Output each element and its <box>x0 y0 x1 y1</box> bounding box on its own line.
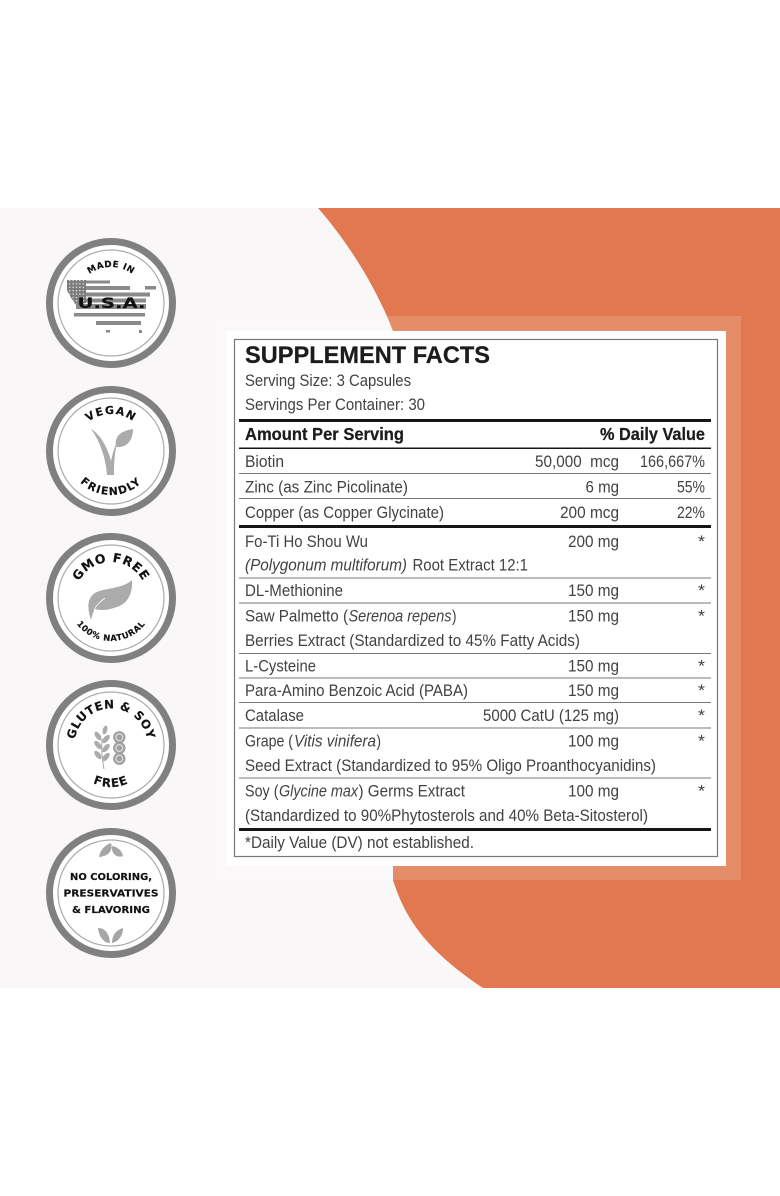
row: soy: (Standardized to 90%Phytosterols and 40% Beta-Sitosterol) <box>245 806 648 825</box>
row: catalase <box>245 706 705 725</box>
row: l-cysteine: L-Cysteine <box>245 656 316 676</box>
row: l-cysteine: * <box>698 656 705 676</box>
row: paba: Para-Amino Benzoic Acid (PABA) <box>245 681 468 700</box>
label: gmo free: GMO FREE <box>73 552 150 580</box>
row: catalase: 5000 CatU (125 mg) <box>483 706 619 725</box>
table column headers: % Daily Value <box>600 424 705 444</box>
icon: bottom leaves <box>98 928 123 943</box>
row: saw palmetto: Saw Palmetto ( <box>245 606 348 626</box>
row: biotin: 166,667% <box>640 452 705 471</box>
row: grape: 100 mg <box>568 732 619 750</box>
icon: flag map of usa <box>67 280 156 333</box>
row: soy: Glycine max <box>279 782 358 800</box>
label: no coloring text: NO COLORING, <box>70 872 152 883</box>
icon: top leaves <box>99 843 123 857</box>
label: no coloring text: & FLAVORING <box>72 905 150 916</box>
row: grape: Vitis vinifera <box>294 732 376 750</box>
row: grape: ) <box>376 732 381 750</box>
background band <box>0 208 780 988</box>
row: dl-methionine: * <box>698 581 705 600</box>
icon: leaf <box>88 580 132 620</box>
row: saw palmetto: Berries Extract (Standardized to 45% Fatty Acids) <box>245 631 580 650</box>
row: fo-ti <box>245 532 705 574</box>
label: no coloring text <box>64 872 159 916</box>
label: no coloring text: PRESERVATIVES <box>64 888 159 900</box>
label: usa: U.S.A. <box>78 296 146 312</box>
row: saw palmetto <box>245 606 705 650</box>
row: soy: * <box>698 782 705 800</box>
row: soy: ) Germs Extract <box>358 782 465 800</box>
label: made in: MADE IN <box>86 260 135 274</box>
row: biotin <box>245 452 705 471</box>
row: l-cysteine <box>245 656 705 676</box>
row: dl-methionine <box>245 581 705 600</box>
translucent panel frame <box>212 316 741 880</box>
label: gluten and soy: GLUTEN & SOY <box>67 700 156 738</box>
row: biotin: 50,000 mcg <box>535 452 619 471</box>
row: fo-ti: * <box>698 532 705 551</box>
table column headers: Amount Per Serving <box>245 424 404 444</box>
label: 100% natural: 100% NATURAL <box>77 620 145 642</box>
row: biotin: Biotin <box>245 452 284 471</box>
row: soy <box>245 782 705 825</box>
row: catalase: Catalase <box>245 706 304 725</box>
row: zinc: Zinc (as Zinc Picolinate) <box>245 478 408 496</box>
serving information: Servings Per Container: 30 <box>245 395 425 414</box>
row: copper <box>245 503 705 522</box>
row: fo-ti: Root Extract 12:1 <box>412 556 528 574</box>
row: l-cysteine: 150 mg <box>568 656 619 676</box>
row: zinc: 55% <box>677 478 705 496</box>
serving information: Serving Size: 3 Capsules <box>245 371 411 390</box>
row: paba: 150 mg <box>568 681 619 700</box>
row: fo-ti: 200 mg <box>568 532 619 551</box>
heading: SUPPLEMENT FACTS <box>245 342 490 369</box>
badge: gmo free <box>46 533 176 663</box>
row: copper: 22% <box>677 503 705 522</box>
label: friendly: FRIENDLY <box>80 476 139 496</box>
badge: vegan friendly <box>46 386 176 516</box>
table border <box>234 340 718 856</box>
icon: v leaf <box>91 429 133 475</box>
row: soy: 100 mg <box>568 782 619 800</box>
row: fo-ti: (Polygonum multiforum) <box>245 556 407 574</box>
label: free: FREE <box>94 775 128 788</box>
row: dl-methionine: DL-Methionine <box>245 581 343 600</box>
row: copper: Copper (as Copper Glycinate) <box>245 503 444 522</box>
row: grape: Seed Extract (Standardized to 95% Oligo Proanthocyanidins) <box>245 756 656 775</box>
row: zinc: 6 mg <box>586 478 619 496</box>
row: saw palmetto: 150 mg <box>568 606 619 626</box>
badge: gluten and soy free <box>46 680 176 810</box>
row: grape: * <box>698 732 705 750</box>
row: saw palmetto: * <box>698 606 705 626</box>
row: paba <box>245 681 705 700</box>
row: paba: * <box>698 681 705 700</box>
serving information <box>245 371 425 414</box>
row: saw palmetto: Serenoa repens <box>348 606 452 626</box>
row: grape: Grape ( <box>245 732 293 750</box>
badge: no coloring <box>50 832 172 954</box>
row: fo-ti: Fo-Ti Ho Shou Wu <box>245 532 368 551</box>
panel: supplement facts table <box>234 340 718 856</box>
row: copper: 200 mcg <box>560 503 619 522</box>
row: catalase: * <box>698 706 705 725</box>
orange curved shape <box>318 208 780 988</box>
row: zinc <box>245 478 705 496</box>
icon: wheat <box>93 725 111 769</box>
table column headers <box>245 424 705 444</box>
label: vegan: VEGAN <box>84 406 136 420</box>
footnote: *Daily Value (DV) not established. <box>245 833 474 852</box>
row: soy: Soy ( <box>245 782 279 800</box>
row: grape <box>245 732 705 775</box>
row: saw palmetto: ) <box>452 606 456 626</box>
icon: soy pod <box>113 731 126 765</box>
row: dl-methionine: 150 mg <box>568 581 619 600</box>
white panel <box>226 331 726 866</box>
badge: made in usa <box>46 238 176 368</box>
